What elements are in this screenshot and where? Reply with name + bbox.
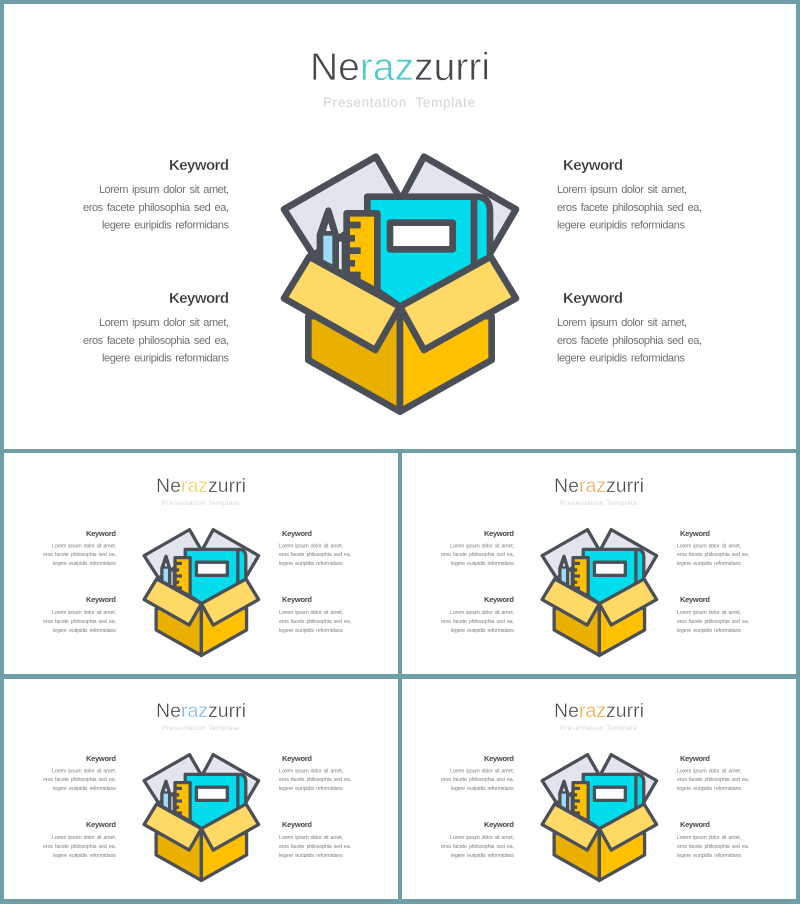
text blocks left: Lorem ipsum dolor sit amet, [52,835,116,841]
text blocks left: legere euripidis reformidans [451,561,514,567]
text blocks left: legere euripidis reformidans [53,786,116,792]
text blocks right [279,754,352,859]
subtitle: Presentation Template [162,500,239,507]
text blocks left: Keyword [86,529,116,538]
title: Nerazzurri [156,475,246,497]
text block: top right: eros facete philosophia sed ea, [557,202,702,214]
text block: bottom left: eros facete philosophia sed ea, [83,335,229,347]
text blocks left: Keyword [86,754,116,763]
text blocks right: eros facete philosophia sed ea, [279,619,352,625]
text block: top right: Keyword [563,157,623,174]
title: Nerazzurri [554,475,644,497]
text blocks right: legere euripidis reformidans [279,628,343,634]
text blocks right: Keyword [680,595,710,604]
text blocks right: eros facete philosophia sed ea, [677,844,750,850]
text blocks right: Lorem ipsum dolor sit amet, [279,835,344,841]
text blocks left: eros facete philosophia sed ea, [43,619,116,625]
text blocks right: legere euripidis reformidans [677,853,741,859]
text block: bottom left: Lorem ipsum dolor sit amet, [99,317,229,329]
subtitle: Presentation Template [560,500,637,507]
text blocks right: eros facete philosophia sed ea, [279,844,352,850]
text block: top right [557,157,702,232]
text blocks right: Lorem ipsum dolor sit amet, [677,768,742,774]
text blocks left: Lorem ipsum dolor sit amet, [450,544,514,550]
text blocks right: Keyword [680,754,710,763]
text blocks left: eros facete philosophia sed ea, [43,777,116,783]
text blocks left: eros facete philosophia sed ea, [441,844,514,850]
text blocks left: Keyword [484,754,514,763]
icon: open box with books [144,755,259,880]
text block: bottom left [83,290,230,364]
subtitle: Presentation Template [162,725,239,732]
text blocks left: eros facete philosophia sed ea, [441,619,514,625]
icon: open box with books [284,157,516,412]
text blocks right: Lorem ipsum dolor sit amet, [279,610,344,616]
panel: small slide blue [4,679,398,899]
text block: bottom right: eros facete philosophia sed ea, [557,335,702,347]
text blocks left: Lorem ipsum dolor sit amet, [52,610,116,616]
text blocks left: legere euripidis reformidans [451,628,514,634]
text blocks right: eros facete philosophia sed ea, [279,777,352,783]
text block: bottom right: Lorem ipsum dolor sit amet, [557,317,687,329]
text blocks left: eros facete philosophia sed ea, [441,552,514,558]
text blocks left: Lorem ipsum dolor sit amet, [450,610,514,616]
text blocks left: legere euripidis reformidans [53,853,116,859]
text blocks right: legere euripidis reformidans [677,786,741,792]
text blocks left: Keyword [86,595,116,604]
text block: top left [83,157,230,232]
text blocks right: legere euripidis reformidans [677,561,741,567]
text block: bottom right: Keyword [563,290,623,307]
text blocks left: legere euripidis reformidans [53,561,116,567]
text blocks right: legere euripidis reformidans [279,561,343,567]
text blocks left: eros facete philosophia sed ea, [43,552,116,558]
text blocks right: Keyword [282,820,312,829]
title: Nerazzurri [156,700,246,722]
text blocks right: eros facete philosophia sed ea, [677,777,750,783]
text block: top left: legere euripidis reformidans [102,220,230,232]
panel: small slide amber [402,679,796,899]
text block: top left: Keyword [169,157,229,174]
text blocks left: legere euripidis reformidans [53,628,116,634]
text blocks right: eros facete philosophia sed ea, [677,619,750,625]
text block: bottom left: Keyword [169,290,229,307]
text blocks right: eros facete philosophia sed ea, [279,552,352,558]
text block: top right: Lorem ipsum dolor sit amet, [557,184,687,196]
text blocks right: legere euripidis reformidans [677,628,741,634]
subtitle: Presentation Template [323,95,475,110]
text blocks right [677,529,750,634]
text blocks right: Lorem ipsum dolor sit amet, [279,544,344,550]
text blocks left: Keyword [86,820,116,829]
text blocks right: Keyword [680,529,710,538]
text blocks left [441,529,514,634]
text blocks right: Lorem ipsum dolor sit amet, [677,835,742,841]
text blocks right: legere euripidis reformidans [279,786,343,792]
text blocks right [677,754,750,859]
panel: small slide yellow [4,453,398,674]
icon: open box with books [542,530,657,655]
icon: open box with books [542,755,657,880]
text blocks right: Lorem ipsum dolor sit amet, [279,768,344,774]
subtitle: Presentation Template [560,725,637,732]
text blocks right: eros facete philosophia sed ea, [677,552,750,558]
panel: small slide orange [402,453,796,674]
text blocks left: Lorem ipsum dolor sit amet, [450,835,514,841]
text blocks left [441,754,514,859]
text block: top right: legere euripidis reformidans [557,220,686,232]
text blocks right [279,529,352,634]
text blocks left: Keyword [484,820,514,829]
text blocks right: Lorem ipsum dolor sit amet, [677,544,742,550]
text blocks right: Lorem ipsum dolor sit amet, [677,610,742,616]
text blocks left: eros facete philosophia sed ea, [441,777,514,783]
text blocks left: eros facete philosophia sed ea, [43,844,116,850]
text blocks left: legere euripidis reformidans [451,786,514,792]
text blocks right: Keyword [282,529,312,538]
panel: main slide [4,4,796,449]
text blocks right: Keyword [680,820,710,829]
text blocks left: Keyword [484,529,514,538]
text block: bottom right: legere euripidis reformidans [557,352,686,364]
text blocks left: Lorem ipsum dolor sit amet, [52,544,116,550]
text blocks right: Keyword [282,754,312,763]
text blocks left [43,529,116,634]
icon: open box with books [144,530,259,655]
title: Nerazzurri [310,46,490,89]
text blocks right: Keyword [282,595,312,604]
text blocks right: legere euripidis reformidans [279,853,343,859]
title: Nerazzurri [554,700,644,722]
text block: bottom left: legere euripidis reformidans [102,352,230,364]
text block: bottom right [557,290,702,364]
text blocks left: Lorem ipsum dolor sit amet, [52,768,116,774]
text blocks left [43,754,116,859]
text block: top left: eros facete philosophia sed ea, [83,202,229,214]
text blocks left: legere euripidis reformidans [451,853,514,859]
text blocks left: Keyword [484,595,514,604]
text blocks left: Lorem ipsum dolor sit amet, [450,768,514,774]
text block: top left: Lorem ipsum dolor sit amet, [99,184,229,196]
